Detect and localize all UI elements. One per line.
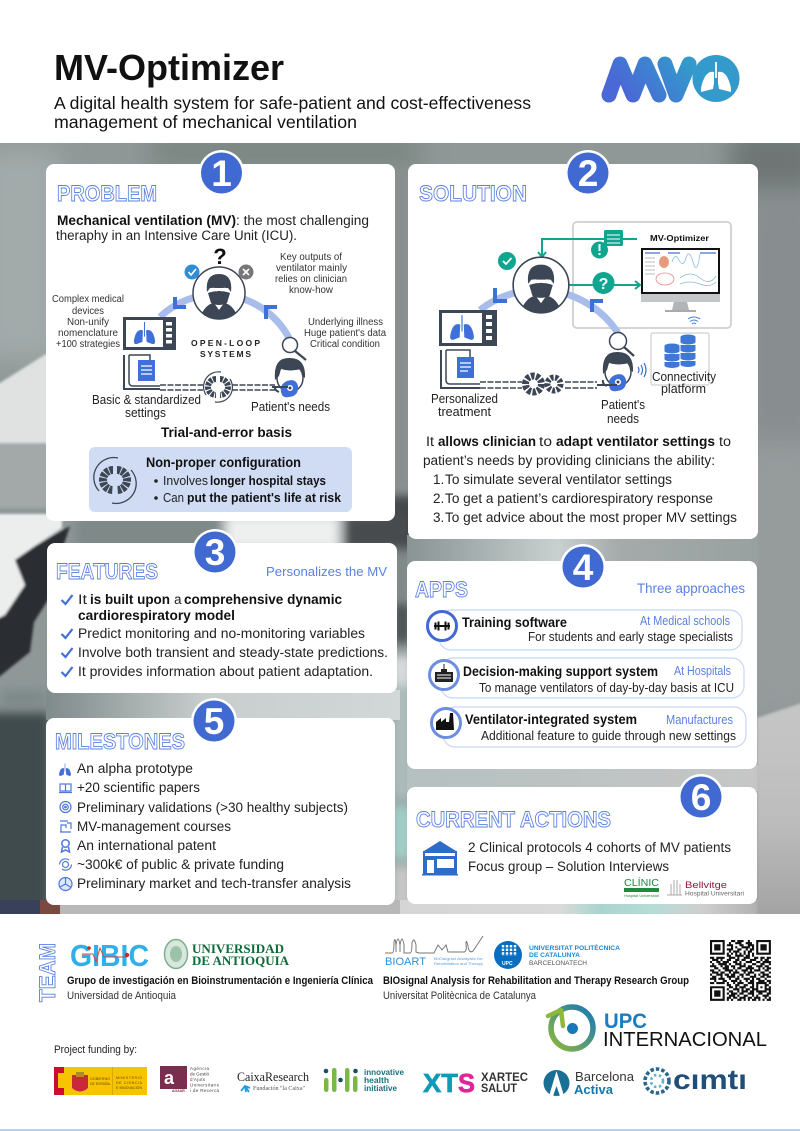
- label: open-loop systems: OPEN-LOOP: [191, 338, 260, 348]
- icon: database: [664, 334, 696, 368]
- logo: universidad de antioquia: [164, 940, 290, 968]
- label: open-loop systems: SYSTEMS: [200, 349, 251, 359]
- number badge 4: 4: [573, 547, 594, 588]
- logo: BIOART: [385, 936, 484, 968]
- label: clinician know-how: know-how: [289, 285, 334, 296]
- milestone list: Preliminary validations (>30 healthy subjects): [77, 800, 348, 815]
- label: patient conditions: [304, 317, 386, 350]
- team text: GIBIC: Universidad de Antioquia: [67, 990, 177, 1002]
- logo: Barcelona Activa: Barcelona: [575, 1069, 635, 1084]
- logo: XTS Xartec Salut: S: [458, 1068, 475, 1098]
- logo: AGAUR: d'Ajuts: [190, 1077, 206, 1082]
- heading: features: FEATURES: [56, 559, 158, 584]
- icon: dumbbell: [428, 612, 456, 640]
- logo: XTS Xartec Salut: SALUT: [481, 1081, 518, 1095]
- row: decision support: [430, 658, 744, 698]
- row: decision support: To manage ventilators of day-by-day basis at ICU: [479, 681, 734, 695]
- panel: features: [47, 529, 397, 693]
- label: devices: Non-unify: [67, 317, 109, 328]
- icon: alert bubble: [591, 230, 623, 258]
- feature list: Predict monitoring and no-monitoring variables: [78, 626, 365, 641]
- feature list: Involve both transient and steady-state predictions.: [78, 645, 388, 660]
- row: training software: [428, 610, 742, 650]
- icon: question: ?: [599, 276, 608, 293]
- label: devices: devices: [72, 306, 104, 317]
- arrowheads: [175, 297, 277, 319]
- icon: monitor: [123, 317, 176, 350]
- solution text: allows clinician: [438, 434, 536, 449]
- connectivity box: [651, 333, 709, 385]
- icon: gears: [526, 376, 560, 392]
- actions text: 2 Clinical protocols 4 cohorts of MV patients: [468, 840, 731, 855]
- logo: UPC Internacional: INTERNACIONAL: [603, 1029, 767, 1051]
- label: connectivity platform: platform: [661, 382, 706, 396]
- solution text: [423, 434, 737, 525]
- logo: BIOART: BIOsignal Analysis for: [434, 957, 484, 961]
- panel: current actions: [407, 774, 757, 904]
- solution text: to: [539, 434, 552, 449]
- logo: clinic barcelona: Hospital Universitari: [624, 894, 659, 898]
- heading: current actions: CURRENT ACTIONS: [416, 807, 611, 832]
- intro text: theraphy in an Intensive Care Unit (ICU).: [56, 228, 297, 243]
- number badge 4: [560, 544, 606, 590]
- icon: ventilator tubing and document: [124, 355, 275, 390]
- green query arrow: [568, 281, 640, 289]
- label: clinician know-how: [275, 252, 347, 296]
- solution text: To simulate several ventilator settings: [445, 472, 672, 487]
- feature list: a: [174, 592, 182, 607]
- logo: AGAUR: [160, 1066, 220, 1093]
- icon: ventilator tubing and document: [441, 350, 597, 388]
- logo: ministerio: DE CIENCIA: [116, 1081, 143, 1085]
- number badge 2: [565, 150, 611, 196]
- logo: AGAUR: Agència: [190, 1066, 209, 1071]
- intro text: Mechanical ventilation (MV): [57, 213, 236, 228]
- panel: solution: [408, 150, 758, 539]
- number badge 3: [192, 529, 238, 575]
- logo: innovative health initiative: [324, 1067, 404, 1093]
- question mark: ?: [213, 244, 227, 269]
- logo: AGAUR: de Gestió: [190, 1072, 209, 1076]
- row: ventilator-integrated: Manufactures: [666, 713, 733, 727]
- logo: BIOART: BIOART: [385, 956, 426, 968]
- arrowheads: [495, 288, 603, 312]
- row: training software: For students and early stage specialists: [528, 630, 733, 644]
- logo: bellvitge: [667, 880, 744, 898]
- logo: UPC: BARCELONATECH: [529, 961, 587, 967]
- label: personalized treatment: treatment: [438, 405, 492, 419]
- label: patient conditions: Huge patient's data: [304, 328, 386, 339]
- solution text: To get a patient’s cardiorespiratory response: [445, 491, 713, 506]
- logo: CaixaResearch: Fundación "la Caixa": [253, 1085, 305, 1092]
- logo: bellvitge: Bellvitge: [685, 880, 727, 891]
- open-loop arc: [160, 294, 290, 340]
- icon: gears cycle: [94, 458, 136, 503]
- tube connector: [597, 384, 617, 386]
- solution text: 3.: [433, 510, 444, 525]
- icon: factory: [432, 708, 460, 738]
- logo: cimti: cımtı: [673, 1064, 747, 1095]
- panel: milestones: [46, 698, 395, 905]
- team text: BIOART: [383, 975, 689, 1002]
- number badge 6: [678, 774, 724, 820]
- label: personalized treatment: [431, 392, 498, 419]
- title: MV-Optimizer: [54, 47, 284, 88]
- solution text: It: [426, 434, 434, 449]
- solution arc: [480, 290, 618, 333]
- logo: XTS Xartec Salut: XARTEC: [481, 1070, 528, 1084]
- label: personalized treatment: Personalized: [431, 392, 498, 406]
- background photo: [0, 130, 800, 915]
- logo: AGAUR: a: [164, 1068, 175, 1088]
- label: devices: [52, 294, 124, 350]
- subtitle: [54, 93, 531, 132]
- icon: clinician: [193, 267, 245, 319]
- solution text: patient’s needs by providing clinicians the ability:: [423, 453, 715, 468]
- heading: apps: APPS: [415, 577, 468, 602]
- logo: CaixaResearch: CaixaResearch: [237, 1069, 309, 1084]
- team text: BIOART: BIOsignal Analysis for Rehabilitation and Therapy Research Group: [383, 975, 689, 987]
- logo: AGAUR: AGAUR: [172, 1089, 185, 1093]
- logo: innovative health initiative: innovative: [364, 1067, 404, 1077]
- subtitle: management of mechanical ventilation: [54, 112, 357, 132]
- icon: magnifier: [610, 332, 634, 356]
- label: basic settings: Basic & standardized: [92, 393, 201, 407]
- row: training software: Training software: [462, 615, 567, 630]
- logo: innovative health initiative: initiative: [364, 1083, 397, 1093]
- logo: universidad de antioquia: UNIVERSIDAD: [192, 941, 284, 956]
- feature list: comprehensive dynamic: [184, 592, 342, 607]
- row: ventilator-integrated: [432, 707, 746, 747]
- milestone list: An alpha prototype: [77, 761, 193, 776]
- MV-Optimizer panel: [573, 222, 731, 328]
- label: basic settings: settings: [125, 406, 166, 420]
- logo: innovative health initiative: health: [364, 1075, 389, 1085]
- icon: patient wifi: [638, 363, 646, 377]
- intro text: [56, 213, 369, 243]
- solution text: adapt ventilator settings: [556, 434, 715, 449]
- logo: ministerio: DE ESPAÑA: [90, 1081, 111, 1086]
- label: connectivity platform: Connectivity: [652, 370, 717, 384]
- heading: problem: PROBLEM: [57, 181, 157, 206]
- subtitle: A digital health system for safe-patient and cost-effectiveness: [54, 93, 531, 113]
- number badge 3: 3: [205, 532, 225, 573]
- logo: UPC Internacional: [548, 1007, 767, 1051]
- label: basic settings: [92, 393, 201, 420]
- icon: wifi: [688, 317, 700, 324]
- intro text: : the most challenging: [236, 213, 369, 228]
- feature list: is built upon: [90, 592, 170, 607]
- logo: UPC: UPC: [502, 961, 513, 967]
- label: clinician know-how: relies on clinician: [275, 274, 347, 285]
- feature list: It provides information about patient adaptation.: [78, 664, 373, 679]
- logo: universidad de antioquia: DE ANTIOQUIA: [192, 953, 290, 968]
- logo: ministerio: [54, 1067, 147, 1095]
- icon: question: [592, 272, 614, 294]
- logo: UPC: [494, 941, 621, 969]
- label: project funding: Project funding by:: [54, 1044, 137, 1056]
- row: decision support: Decision-making support system: [463, 664, 658, 679]
- callout: non-proper configuration: Non-proper configuration: [146, 455, 301, 470]
- team text: GIBIC: [67, 975, 374, 1002]
- panel: apps: [407, 544, 757, 769]
- logo: Barcelona Activa: Activa: [574, 1082, 614, 1097]
- icons: check marks: [62, 595, 72, 676]
- label: patient's needs: Patient's: [601, 398, 645, 412]
- logo: BIOART: Rehabilitation and Therapy: [434, 962, 483, 966]
- logo: clinic barcelona: CLÍNIC: [624, 876, 659, 889]
- team text: BIOART: Universitat Politècnica de Catalunya: [383, 990, 537, 1002]
- number badge 5: 5: [204, 701, 224, 742]
- feature list: cardiorespiratory model: [78, 608, 235, 623]
- milestone icons: [59, 764, 72, 890]
- label: devices: Complex medical: [52, 294, 124, 305]
- actions text: [468, 840, 731, 874]
- logo: UPC: UNIVERSITAT POLITÈCNICA: [529, 944, 621, 952]
- icon: gears cycle: [204, 372, 232, 402]
- panel: problem: [46, 150, 395, 521]
- number badge 5: [191, 698, 237, 744]
- actions text: Focus group – Solution Interviews: [468, 859, 669, 874]
- logo: MVO: [609, 55, 740, 102]
- logo: UPC Internacional: UPC: [604, 1010, 647, 1033]
- callout: non-proper configuration: Involves: [163, 474, 208, 488]
- heading: milestones: MILESTONES: [55, 729, 185, 754]
- tube connector: [272, 386, 288, 388]
- solution text: To get advice about the most proper MV settings: [445, 510, 737, 525]
- callout: non-proper configuration: put the patient's life at risk: [187, 491, 341, 505]
- solution text: 1.: [433, 472, 444, 487]
- logo: XTS Xartec Salut: [423, 1068, 528, 1098]
- label: trial-and-error: Trial-and-error basis: [161, 425, 292, 440]
- logo: UPC: DE CATALUNYA: [529, 953, 581, 959]
- logo: AGAUR: Universitaris: [190, 1082, 220, 1088]
- cross icon: [238, 264, 254, 280]
- icon: patient: [603, 352, 633, 391]
- green feedback arrow: [538, 239, 637, 257]
- logo: XTS Xartec Salut: XT: [423, 1068, 458, 1098]
- logo: ministerio: E INNOVACIÓN: [116, 1085, 142, 1090]
- milestone list: +20 scientific papers: [77, 780, 200, 795]
- logo: GIBIC: GIBIC: [70, 938, 149, 973]
- logo: clinic barcelona: [624, 876, 659, 898]
- heading: team: TEAM: [35, 943, 60, 1002]
- solution text: 2.: [433, 491, 444, 506]
- number badge 1: [198, 150, 244, 196]
- icon: clinic: [422, 841, 458, 876]
- QR code: [710, 941, 771, 1000]
- label: open-loop systems: [191, 338, 260, 359]
- logo: CaixaResearch: [237, 1069, 309, 1092]
- heading: solution: SOLUTION: [419, 181, 527, 206]
- icon: magnifier: [282, 338, 306, 360]
- label: devices: nomenclature: [58, 328, 118, 339]
- label: patient's needs: [601, 398, 645, 426]
- number badge 1: 1: [211, 153, 232, 194]
- subtitle: Personalizes the MV: [266, 565, 388, 579]
- milestone list: [77, 761, 351, 891]
- milestone list: An international patent: [77, 838, 216, 853]
- icon: computer screen: [641, 248, 720, 312]
- label: patient conditions: Underlying illness: [308, 317, 383, 328]
- check icon: [184, 264, 200, 280]
- logo: AGAUR: i de Recerca: [190, 1088, 219, 1093]
- label: patient's needs: Patient's needs: [251, 400, 330, 414]
- row: ventilator-integrated: Additional feature to guide through new settings: [481, 729, 736, 743]
- logo: Barcelona Activa: [544, 1069, 635, 1097]
- subtitle: Three approaches: [637, 581, 745, 596]
- logo: ministerio: GOBIERNO: [90, 1077, 110, 1081]
- logo: bellvitge: Hospital Universitari: [685, 890, 744, 898]
- number badge 2: 2: [578, 153, 598, 194]
- label: patient conditions: Critical condition: [310, 339, 380, 350]
- icon: patient: [275, 358, 305, 397]
- icon: green check: [498, 252, 516, 270]
- row: ventilator-integrated: Ventilator-integrated system: [465, 712, 637, 727]
- bottom strip: [0, 1129, 800, 1131]
- feature list: It: [78, 592, 87, 607]
- callout: non-proper configuration: Can: [163, 491, 184, 505]
- label: clinician know-how: Key outputs of: [280, 252, 342, 263]
- label: patient's needs: needs: [607, 412, 639, 426]
- callout: non-proper configuration: [89, 447, 352, 512]
- feature list: [78, 592, 388, 679]
- milestone list: ~300k€ of public & private funding: [77, 857, 284, 872]
- label: connectivity platform: [652, 370, 717, 396]
- icon: hospital: [430, 660, 458, 690]
- label: clinician know-how: ventilator mainly: [276, 263, 347, 274]
- solution text: to: [719, 434, 731, 449]
- label: devices: +100 strategies: [56, 339, 120, 350]
- milestone list: Preliminary market and tech-transfer analysis: [77, 876, 351, 891]
- number badge 6: 6: [691, 777, 711, 818]
- team text: GIBIC: Grupo de investigación en Bioinstrumentación e Ingeniería Clínica: [67, 975, 374, 987]
- logo: cimti: [645, 1064, 747, 1095]
- row: training software: At Medical schools: [640, 614, 730, 628]
- row: decision support: At Hospitals: [674, 664, 731, 678]
- milestone list: MV-management courses: [77, 819, 231, 834]
- callout: non-proper configuration: longer hospital stays: [210, 474, 326, 488]
- label: MV-Optimizer: MV-Optimizer: [650, 233, 710, 243]
- icon: clinician: [513, 257, 569, 313]
- logo: ministerio: MINISTERIO: [116, 1076, 142, 1080]
- icon: monitor: [439, 310, 497, 346]
